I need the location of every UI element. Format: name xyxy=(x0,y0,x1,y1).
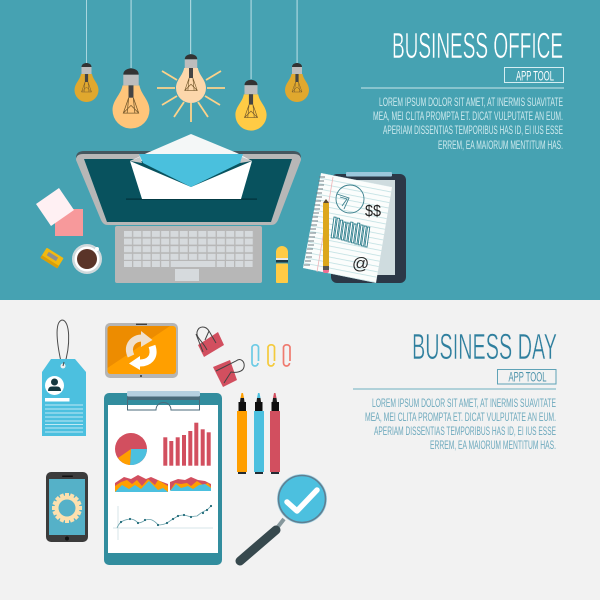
binder clip 2 xyxy=(213,360,244,387)
magnifying glass with check xyxy=(240,474,326,561)
text block: office description xyxy=(373,95,563,152)
panel: teal top background xyxy=(0,0,600,300)
icon: sync arrows xyxy=(129,331,153,370)
paper clips xyxy=(252,345,290,366)
icon: pencil sharpener xyxy=(40,248,64,268)
area chart left xyxy=(115,475,168,492)
smartphone with gear xyxy=(46,472,88,542)
bar sketch xyxy=(331,217,370,247)
notebook page xyxy=(303,173,392,283)
clip xyxy=(127,391,200,410)
bulb 5 xyxy=(285,0,309,102)
pie chart xyxy=(115,433,147,465)
laptop xyxy=(76,134,301,283)
paper clip yellow xyxy=(268,345,274,366)
clipboard with notebook page xyxy=(303,172,406,283)
pencil xyxy=(323,199,329,273)
marker red xyxy=(270,393,280,474)
badge: app tool: APP TOOL xyxy=(508,370,547,384)
badge: app tool xyxy=(504,68,564,84)
dollar signs: $$ xyxy=(365,203,381,220)
badge: app tool xyxy=(498,370,556,384)
tablet with sync icon xyxy=(105,323,178,378)
marker blue xyxy=(254,393,264,474)
bulb 3 glowing xyxy=(157,0,225,122)
hanging light bulbs xyxy=(74,0,309,131)
pie sketch xyxy=(336,185,364,213)
text block: day description xyxy=(365,396,556,452)
area chart right xyxy=(170,477,211,491)
panel: light bottom background xyxy=(0,300,600,600)
price tag xyxy=(42,320,86,436)
badge: app tool: APP TOOL xyxy=(516,68,554,84)
marker orange xyxy=(237,393,247,474)
sticky notes xyxy=(36,188,83,236)
icon: usb stick xyxy=(276,246,288,283)
at sign: @ xyxy=(352,254,369,273)
laptop keyboard base xyxy=(115,226,262,283)
icon: gear xyxy=(52,493,82,523)
binder clip 1 xyxy=(196,327,224,357)
bulb 2 xyxy=(113,0,149,128)
icon: check mark xyxy=(287,490,317,511)
bulb 4 xyxy=(235,0,267,131)
paper clip blue xyxy=(252,345,258,366)
avatar xyxy=(45,376,64,395)
clipboard with charts xyxy=(104,391,222,565)
line chart xyxy=(113,505,213,540)
icon: coffee cup xyxy=(72,244,102,274)
bar chart xyxy=(163,423,211,466)
email envelope xyxy=(130,134,252,199)
paper clip red xyxy=(284,345,290,366)
bulb 1 xyxy=(74,0,98,102)
